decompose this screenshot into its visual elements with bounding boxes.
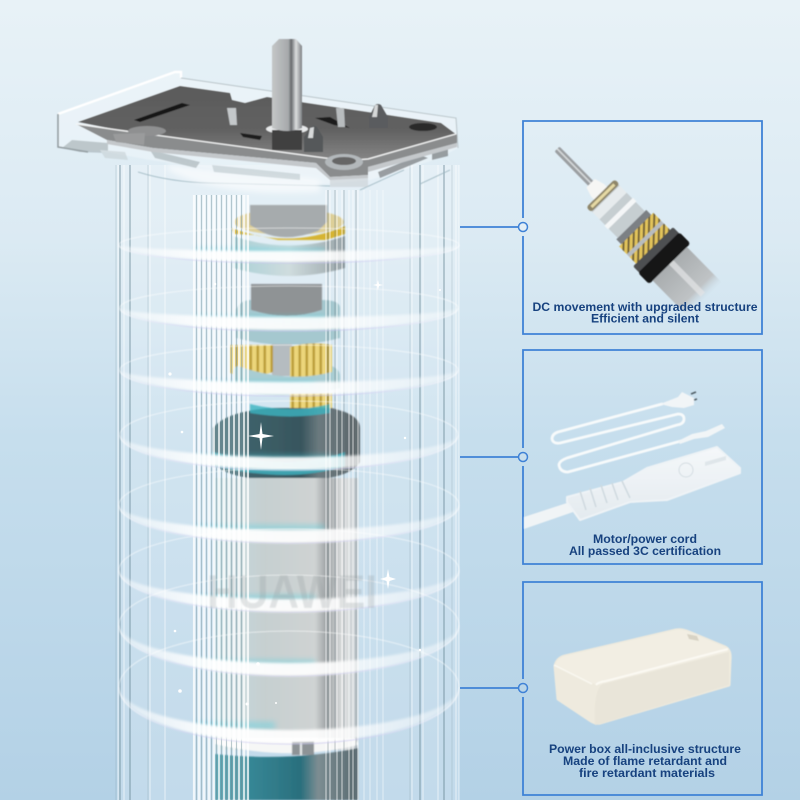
- vertical light streaks: [116, 165, 459, 800]
- upper gold disc and cylinder: [232, 205, 345, 276]
- plate flange: [76, 124, 457, 177]
- connector: panel 3: [460, 684, 528, 692]
- brand watermark: HUAWEI: [207, 565, 377, 618]
- caption: Efficient and silent: [591, 314, 699, 326]
- lower disc: [233, 366, 340, 396]
- hexagonal shaft: [272, 39, 302, 131]
- swirling light rings: [119, 228, 459, 744]
- icon: large plug: [524, 447, 740, 529]
- top mounting plate: [58, 39, 458, 193]
- teal bottom section: [215, 748, 358, 800]
- acrylic underside details: [62, 140, 448, 187]
- upper planetary gears: [230, 343, 332, 381]
- cyan glow bands: [195, 248, 335, 729]
- motor column illustration: [58, 39, 459, 800]
- icon: power box: [554, 630, 730, 725]
- caption: All passed 3C certification: [569, 546, 721, 558]
- shaft collar: [266, 124, 308, 134]
- caption: [569, 534, 721, 558]
- caption: Motor/power cord: [593, 534, 697, 546]
- grey cylinder: [251, 284, 322, 316]
- metal plate: [78, 86, 457, 160]
- icon: tubular motor: [536, 129, 726, 320]
- plate slots and screws: [113, 103, 437, 170]
- glass tube: [118, 165, 459, 800]
- caption: Made of flame retardant and: [563, 756, 727, 768]
- caption: fire retardant materials: [579, 768, 715, 780]
- panel: power cord: [523, 350, 762, 564]
- lower gears: [290, 393, 332, 412]
- threaded pins: [304, 104, 388, 152]
- panel: power box: [523, 582, 762, 795]
- caption: [549, 744, 741, 780]
- internal motor parts: [213, 205, 360, 800]
- clear acrylic cover: [58, 72, 458, 193]
- panel: DC movement: [523, 121, 762, 334]
- connector: panel 2: [460, 452, 528, 462]
- caption: DC movement with upgraded structure: [532, 302, 758, 314]
- caption: Power box all-inclusive structure: [549, 744, 741, 756]
- icon: coiled cord: [552, 392, 725, 472]
- connector: panel 1: [460, 222, 528, 232]
- middle disc: [236, 300, 340, 345]
- dark motor section: [213, 404, 360, 482]
- white motor body: [215, 478, 358, 755]
- sparkles: [168, 280, 441, 706]
- caption: [532, 302, 758, 326]
